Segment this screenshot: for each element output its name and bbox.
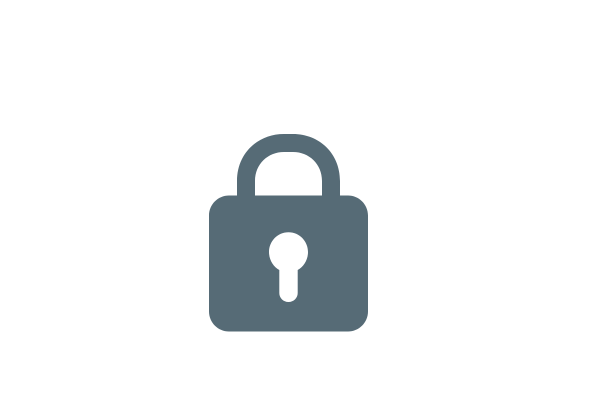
padlock shackle <box>237 134 340 197</box>
padlock body with keyhole <box>209 196 368 332</box>
